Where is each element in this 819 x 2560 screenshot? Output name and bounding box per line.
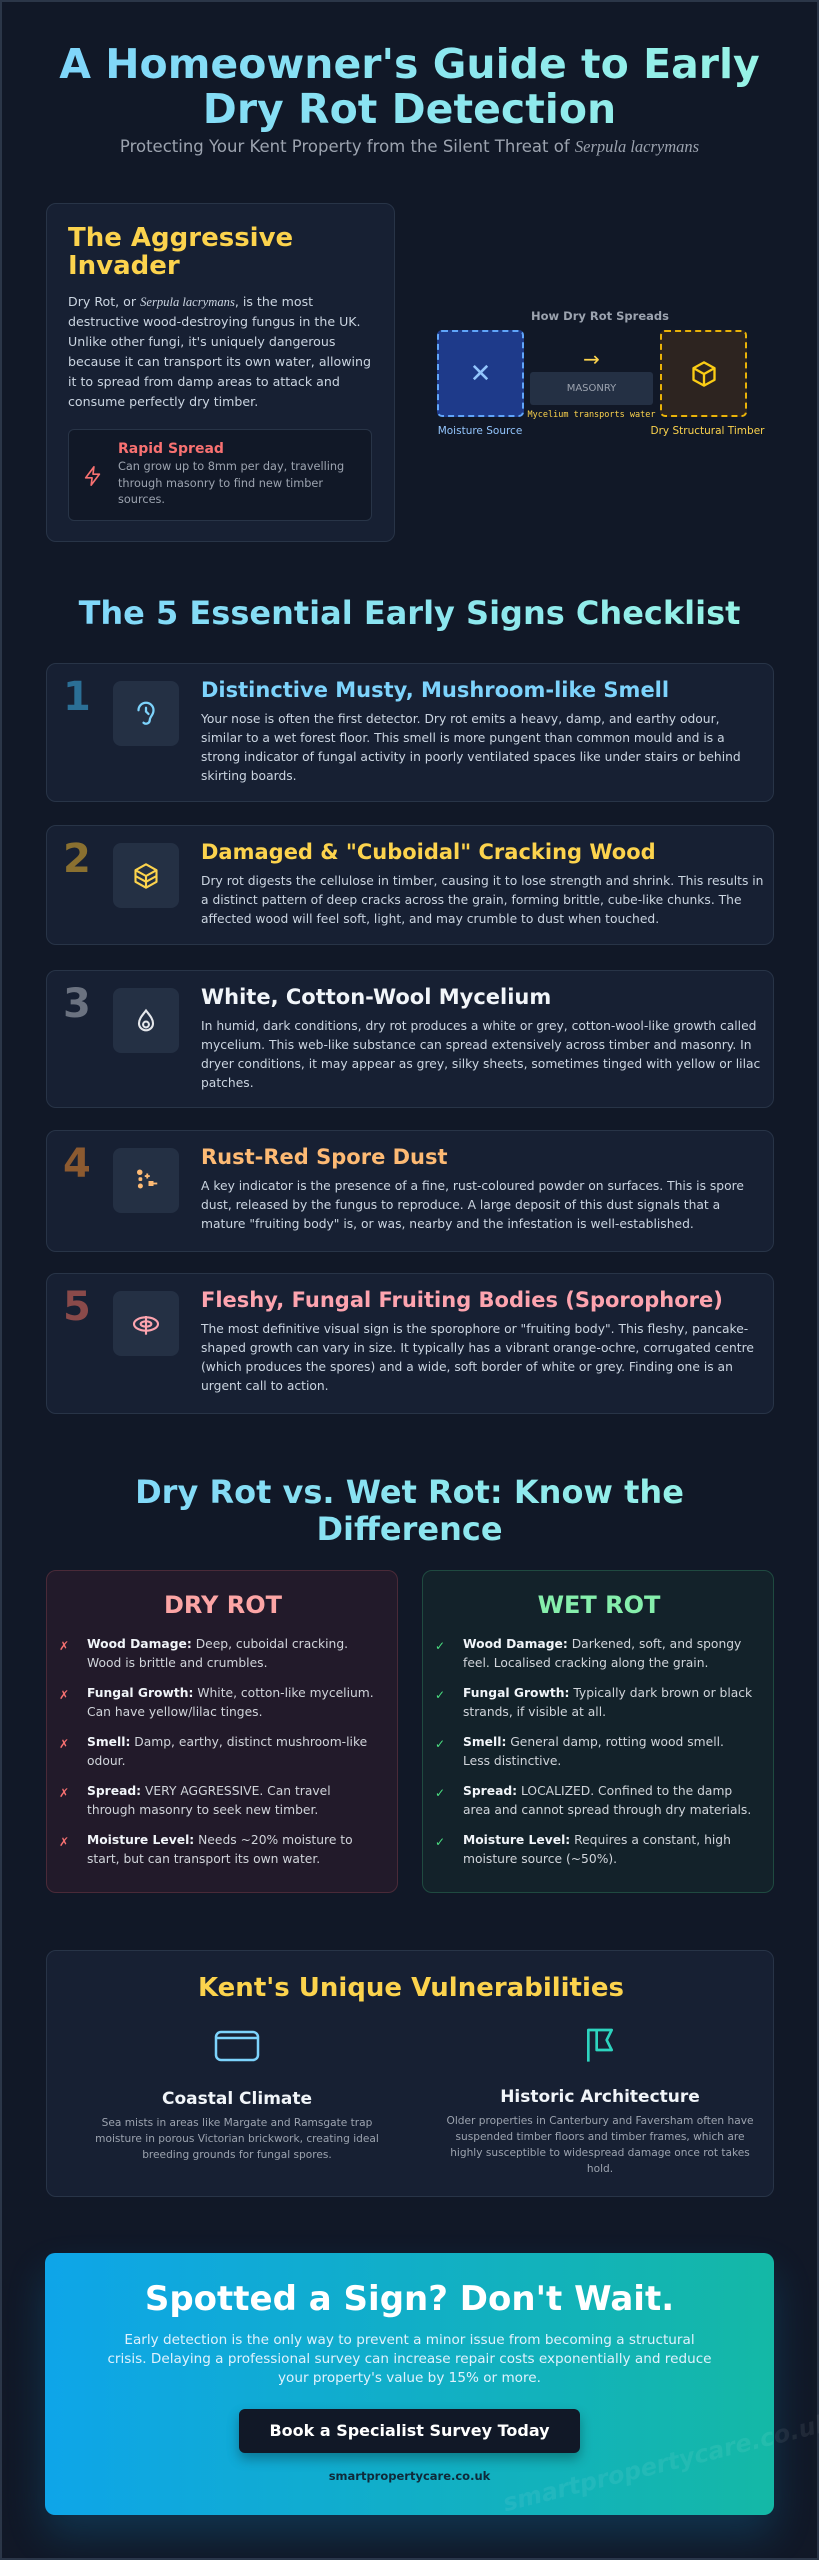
- panel: sign 4: 4: [63, 1141, 91, 1187]
- labels: Moisture Source: [438, 425, 522, 437]
- list: Fungal Growth: White, cotton-like mycelium. Can have yellow/lilac tinges.: [87, 1686, 374, 1719]
- panel: call to action: [45, 2253, 774, 2515]
- callout heading: Rapid Spread: [118, 441, 224, 457]
- panel: sign 2: [46, 825, 774, 945]
- panel: sign 2: Damaged & "Cuboidal" Cracking Wood: [201, 840, 656, 864]
- list: [59, 1637, 374, 1866]
- icon: spores: [113, 1148, 179, 1213]
- url: smartpropertycare.co.uk: [329, 2469, 490, 2483]
- panel: sign 5: Fleshy, Fungal Fruiting Bodies (Sporophore): [201, 1288, 723, 1312]
- panel: sign 4: A key indicator is the presence of a fine, rust-coloured powder on surfaces. This is spore dust, released by the fungus to reproduce. A large deposit of this dust signals that a mature "fruiting body" is, or was, nearby and the infestation is well-established.: [201, 1179, 744, 1231]
- heading: DRY ROT: [164, 1591, 282, 1619]
- list: ✓: [435, 1688, 445, 1702]
- icon: fruiting body: [113, 1291, 179, 1356]
- moisture source box: [437, 330, 524, 417]
- panel: sign 4: [46, 1130, 774, 1252]
- list: ✗: [59, 1688, 69, 1702]
- panel: sign 2: 2: [63, 836, 91, 882]
- diagram heading: How Dry Rot Spreads: [531, 309, 669, 323]
- icon: ear: [113, 681, 179, 746]
- panel: sign 1: [46, 663, 774, 802]
- heading: Invader: [68, 251, 180, 281]
- list: ✓: [435, 1835, 445, 1849]
- list: Wood Damage: Darkened, soft, and spongy feel. Localised cracking along the grain.: [463, 1637, 741, 1670]
- list: Spread: LOCALIZED. Confined to the damp area and cannot spread through dry materials.: [463, 1784, 751, 1817]
- panel: sign 2: Dry rot digests the cellulose in timber, causing it to lose strength and shrink. This results in a distinct pattern of deep cracks across the grain, forming brittle, cube-like chunks. The affected wood will feel soft, light, and may crumble to dust when touched.: [201, 874, 763, 926]
- panel: sign 4: Rust-Red Spore Dust: [201, 1145, 448, 1169]
- heading: The Aggressive: [68, 223, 293, 253]
- item: coastal: Sea mists in areas like Margate and Ramsgate trap moisture in porous Victorian brickwork, creating ideal breeding grounds for fungal spores.: [95, 2117, 379, 2161]
- callout text: Can grow up to 8mm per day, travelling through masonry to find new timber sources.: [118, 460, 344, 506]
- moisture source box: ✕: [470, 358, 491, 388]
- panel: sign 1: Distinctive Musty, Mushroom-like Smell: [201, 678, 669, 702]
- list: ✗: [59, 1737, 69, 1751]
- button: Book a Specialist Survey Today: [269, 2421, 550, 2440]
- list: Moisture Level: Requires a constant, high moisture source (~50%).: [463, 1833, 731, 1866]
- list: Fungal Growth: Typically dark brown or black strands, if visible at all.: [463, 1686, 752, 1719]
- item: historic: Older properties in Canterbury and Faversham often have suspended timber floors and timber frames, which are highly susceptible to widespread damage once rot takes hold.: [446, 2115, 754, 2175]
- list: ✗: [59, 1786, 69, 1800]
- panel: sign 3: In humid, dark conditions, dry rot produces a white or grey, cotton-wool-like growth called mycelium. This web-like substance can spread extensively across timber and masonry. In dryer conditions, it may appear as grey, silky sheets, sometimes tinged with yellow or lilac patches.: [201, 1019, 760, 1090]
- list: ✓: [435, 1639, 445, 1653]
- list: Smell: General damp, rotting wood smell. Less distinctive.: [463, 1735, 724, 1768]
- list: ✓: [435, 1786, 445, 1800]
- heading: checklist: The 5 Essential Early Signs Checklist: [79, 594, 740, 632]
- callout: rapid spread: [68, 429, 372, 521]
- title: [0, 42, 819, 132]
- list: Spread: VERY AGGRESSIVE. Can travel through masonry to seek new timber.: [87, 1784, 331, 1817]
- list: ✗: [59, 1835, 69, 1849]
- panel: wet rot: [422, 1570, 774, 1893]
- list: ✗: [59, 1639, 69, 1653]
- icon: mycelium: [113, 988, 179, 1053]
- item: coastal: Coastal Climate: [162, 2089, 312, 2109]
- item: coastal: [95, 2030, 379, 2161]
- subtitle: Protecting Your Kent Property from the Silent Threat of Serpula lacrymans: [120, 137, 699, 156]
- arrow: →: [583, 347, 600, 371]
- panel: sign 5: 5: [63, 1284, 91, 1330]
- list: Moisture Level: Needs ~20% moisture to start, but can transport its own water.: [87, 1833, 353, 1866]
- text: Early detection is the only way to prevent a minor issue from becoming a structural crisis. Delaying a professional survey can increase repair costs exponentially and reduce your property's value by 15% or more.: [107, 2332, 712, 2386]
- masonry: MASONRY: [567, 383, 616, 394]
- panel: aggressive invader: [46, 203, 395, 542]
- list: ✓: [435, 1737, 445, 1751]
- heading: comparison: [0, 1474, 819, 1548]
- icon: window: [214, 2030, 260, 2062]
- heading: comparison: Difference: [316, 1510, 503, 1548]
- panel: sign 5: The most definitive visual sign is the sporophore or "fruiting body". This fleshy, pancake-shaped growth can vary in size. It typically has a vibrant orange-ochre, corrugated centre (which produces the spores) and a wide, soft border of white or grey. Finding one is an urgent call to action.: [201, 1322, 754, 1393]
- panel: sign 1: Your nose is often the first detector. Dry rot emits a heavy, damp, and earthy odour, similar to a wet forest floor. This smell is more pungent than common mould and is a strong indicator of fungal activity in poorly ventilated spaces like under stairs or behind skirting boards.: [201, 712, 741, 783]
- list: Smell: Damp, earthy, distinct mushroom-like odour.: [87, 1735, 367, 1768]
- icon: flag: [587, 2028, 613, 2062]
- icon: lightning: [84, 466, 100, 486]
- item: historic: Historic Architecture: [500, 2087, 700, 2107]
- panel: sign 3: 3: [63, 981, 91, 1027]
- heading: WET ROT: [538, 1591, 660, 1619]
- heading: Kent's Unique Vulnerabilities: [198, 1973, 624, 2003]
- heading: [68, 223, 293, 281]
- text block: Dry Rot, or Serpula lacrymans, is the most destructive wood-destroying fungus in the UK. Unlike other fungi, it's uniquely dangerous because it can transport its own water, allowing it to spread from damp areas to attack and consume perfectly dry timber.: [68, 294, 371, 409]
- diagram: how dry rot spreads: [437, 309, 764, 437]
- panel: sign 5: [46, 1273, 774, 1414]
- heading: Spotted a Sign? Don't Wait.: [145, 2279, 674, 2319]
- masonry: [530, 372, 653, 405]
- item: historic: [446, 2028, 754, 2175]
- list: Wood Damage: Deep, cuboidal cracking. Wood is brittle and crumbles.: [87, 1637, 348, 1670]
- panel: dry rot: [46, 1570, 398, 1893]
- timber box: [660, 330, 747, 417]
- title: Dry Rot Detection: [203, 85, 616, 133]
- heading: comparison: Dry Rot vs. Wet Rot: Know the: [135, 1473, 684, 1511]
- button: [239, 2409, 580, 2453]
- diagram: how dry rot spreads: Mycelium transports water: [528, 410, 655, 420]
- panel: sign 1: 1: [63, 674, 91, 720]
- list: [435, 1637, 752, 1866]
- panel: sign 3: White, Cotton-Wool Mycelium: [201, 985, 551, 1009]
- diagram: how dry rot spreads: Dry Structural Timber: [651, 425, 764, 437]
- panel: kent vulnerabilities: [46, 1950, 774, 2197]
- title: A Homeowner's Guide to Early: [59, 40, 760, 88]
- icon: cube wood: [113, 843, 179, 908]
- panel: sign 3: [46, 970, 774, 1108]
